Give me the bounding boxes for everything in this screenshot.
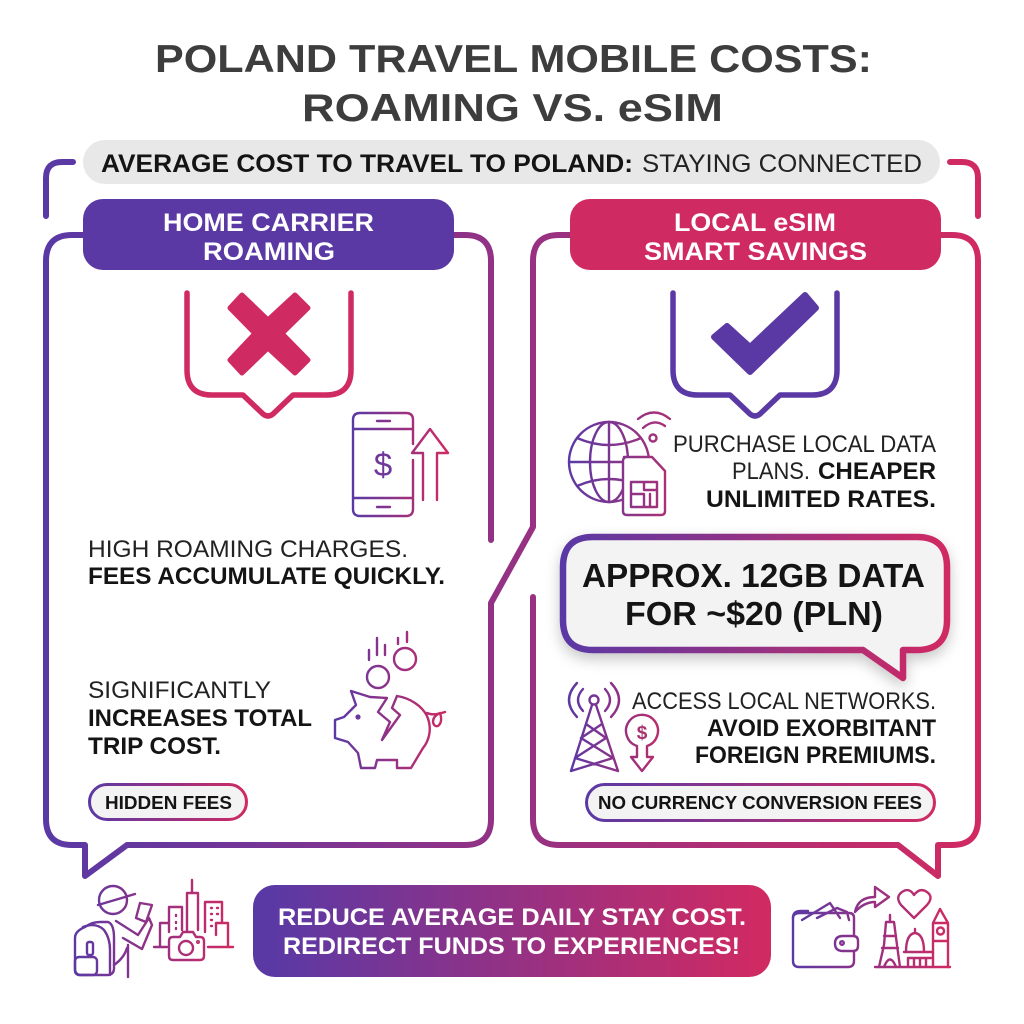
icon: purple check in bracket [673, 293, 837, 416]
subtitle bar: AVERAGE COST TO TRAVEL TO POLAND: [101, 150, 633, 178]
title [155, 38, 872, 130]
pill: hidden fees [90, 784, 246, 820]
heading: home carrier roaming: ROAMING [203, 238, 335, 266]
text: access local networks: ACCESS LOCAL NETWORKS. [632, 688, 936, 715]
text: increases total trip cost: TRIP COST. [88, 733, 221, 760]
banner: reduce average daily stay cost [253, 885, 771, 977]
title: POLAND TRAVEL MOBILE COSTS: [155, 38, 872, 81]
banner: reduce average daily stay cost: REDUCE AVERAGE DAILY STAY COST. [278, 904, 746, 931]
icon: red cross in bracket [187, 293, 351, 416]
bracket: top left [46, 162, 73, 216]
text: purchase local data plans: PLANS. [732, 458, 810, 485]
icon: cell tower and dollar down arrow [569, 683, 658, 771]
icon: broken piggy bank with coins [335, 632, 445, 768]
icon: cell tower and dollar down arrow: $ [637, 723, 648, 744]
icon: traveller with backpack and city [75, 880, 233, 977]
text: high roaming charges: FEES ACCUMULATE QUICKLY. [88, 563, 445, 590]
text: purchase local data plans: CHEAPER [818, 458, 936, 485]
pill: no currency conversion fees [586, 784, 934, 820]
pill: hidden fees: HIDDEN FEES [105, 792, 232, 813]
subtitle bar: STAYING CONNECTED [642, 150, 922, 178]
heading: local esim smart savings: SMART SAVINGS [644, 238, 867, 266]
text: increases total trip cost: SIGNIFICANTLY [88, 677, 271, 704]
text: increases total trip cost [88, 677, 312, 760]
heading: local esim smart savings [570, 199, 941, 270]
title: ROAMING VS. eSIM [302, 87, 723, 130]
banner: reduce average daily stay cost: REDIRECT FUNDS TO EXPERIENCES! [283, 933, 740, 960]
heading: home carrier roaming: HOME CARRIER [163, 209, 374, 237]
icon: globe, wifi and sim card [569, 412, 670, 515]
text: access local networks: AVOID EXORBITANT [707, 715, 936, 742]
text: purchase local data plans: UNLIMITED RATES. [706, 486, 936, 513]
callout: 12gb data price: FOR ~$20 (PLN) [625, 595, 883, 632]
heading: home carrier roaming [83, 199, 454, 270]
callout: 12gb data price: APPROX. 12GB DATA [582, 557, 925, 594]
bracket: top right [950, 162, 978, 216]
panel: home carrier roaming [46, 199, 580, 876]
callout: 12gb data price [563, 537, 947, 678]
text: access local networks: FOREIGN PREMIUMS. [695, 742, 936, 769]
panel: local esim smart savings [533, 199, 978, 876]
icon: phone with dollar and rising arrow [353, 413, 448, 516]
text: increases total trip cost: INCREASES TOTAL [88, 705, 312, 732]
text: high roaming charges [88, 536, 445, 590]
text: access local networks [632, 688, 936, 769]
icon: wallet, arrow, heart and landmarks [793, 887, 950, 967]
text: purchase local data plans [673, 431, 937, 513]
heading: local esim smart savings: LOCAL eSIM [674, 209, 836, 237]
pill: no currency conversion fees: NO CURRENCY CONVERSION FEES [598, 792, 922, 813]
text: purchase local data plans: PURCHASE LOCAL DATA [673, 431, 937, 458]
icon: phone with dollar and rising arrow: $ [374, 446, 392, 483]
subtitle bar [83, 140, 940, 184]
text: high roaming charges: HIGH ROAMING CHARGES. [88, 536, 408, 563]
